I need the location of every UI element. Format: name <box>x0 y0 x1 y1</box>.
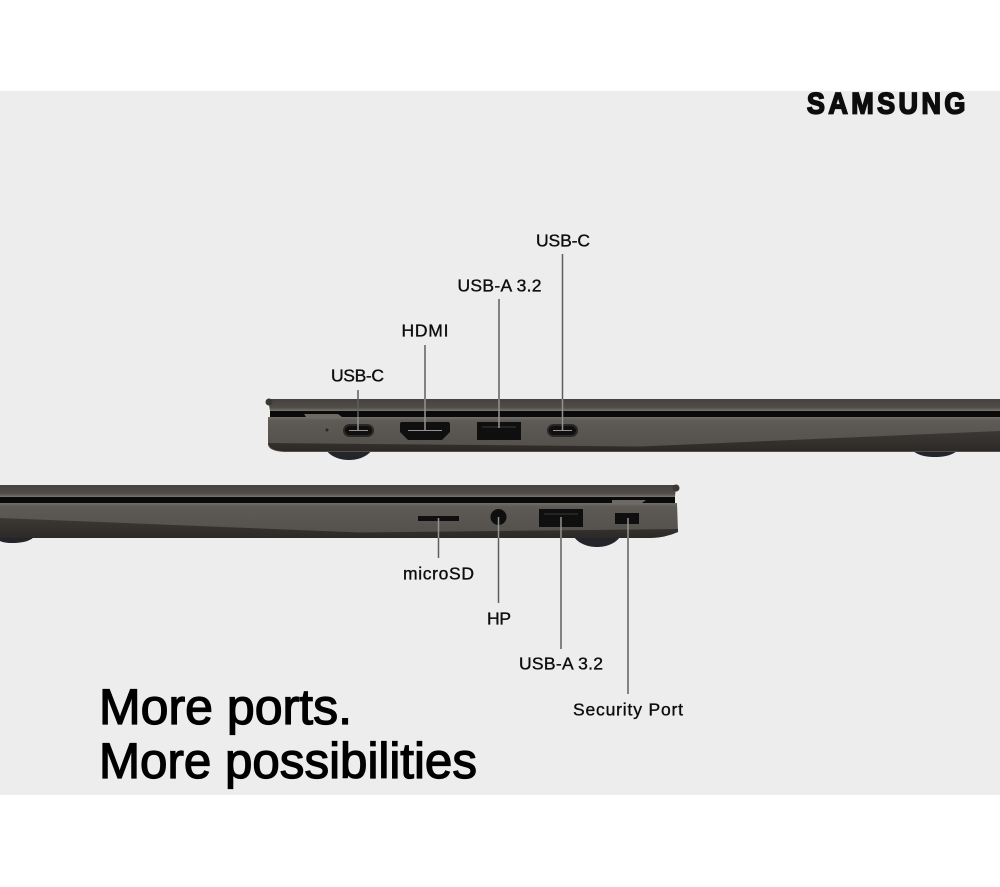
Samsung logo: SAMSUNG <box>807 87 965 121</box>
port: HP <box>490 509 506 525</box>
callout: USB-C left <box>331 366 384 431</box>
grey strip under lid <box>612 500 646 503</box>
laptop: right side view with ports <box>0 484 680 547</box>
foot: right <box>574 537 620 547</box>
hinge tip <box>266 398 272 406</box>
hinge tip <box>672 484 680 492</box>
callout: Security Port: Security Port <box>573 700 683 720</box>
callout: USB-C left: USB-C <box>331 366 384 386</box>
callout: HP: HP <box>487 608 511 628</box>
hinge gap <box>270 411 1000 417</box>
port inner contacts <box>349 427 572 430</box>
headline <box>99 679 477 789</box>
panel: grey background <box>0 91 1000 795</box>
callout: microSD <box>403 518 474 584</box>
lid <box>268 399 1000 411</box>
callout: microSD: microSD <box>403 564 474 584</box>
port: USB-C <box>343 424 374 437</box>
foot: left <box>0 537 34 543</box>
foot: left <box>326 450 372 460</box>
port: microSD <box>418 516 459 521</box>
callout: USB-A 3.2 bottom: USB-A 3.2 <box>519 654 603 674</box>
lid <box>0 485 676 497</box>
base <box>268 417 1000 452</box>
laptop: left side view with ports <box>266 398 1000 460</box>
port inner contacts <box>544 513 578 515</box>
headline: More possibilities <box>99 733 477 789</box>
base <box>0 503 678 538</box>
port: USB-A 3.2 <box>477 422 521 440</box>
foot: right <box>912 450 958 457</box>
callout: HDMI: HDMI <box>402 320 448 340</box>
callout: HDMI <box>402 320 448 431</box>
port: Security Port <box>615 513 639 524</box>
hinge gap <box>0 497 675 503</box>
port: HDMI <box>400 422 450 440</box>
base lower wedge <box>0 518 678 538</box>
headline: More ports. <box>99 679 352 735</box>
port: USB-C <box>547 424 578 437</box>
callout: USB-A 3.2 top: USB-A 3.2 <box>458 276 542 296</box>
indicator light <box>326 428 328 432</box>
base lower wedge <box>268 431 1000 451</box>
grey strip under lid <box>304 414 342 417</box>
callout: USB-C right: USB-C <box>536 230 590 250</box>
port: USB-A 3.2 <box>539 509 583 527</box>
callout: HP <box>487 517 511 628</box>
